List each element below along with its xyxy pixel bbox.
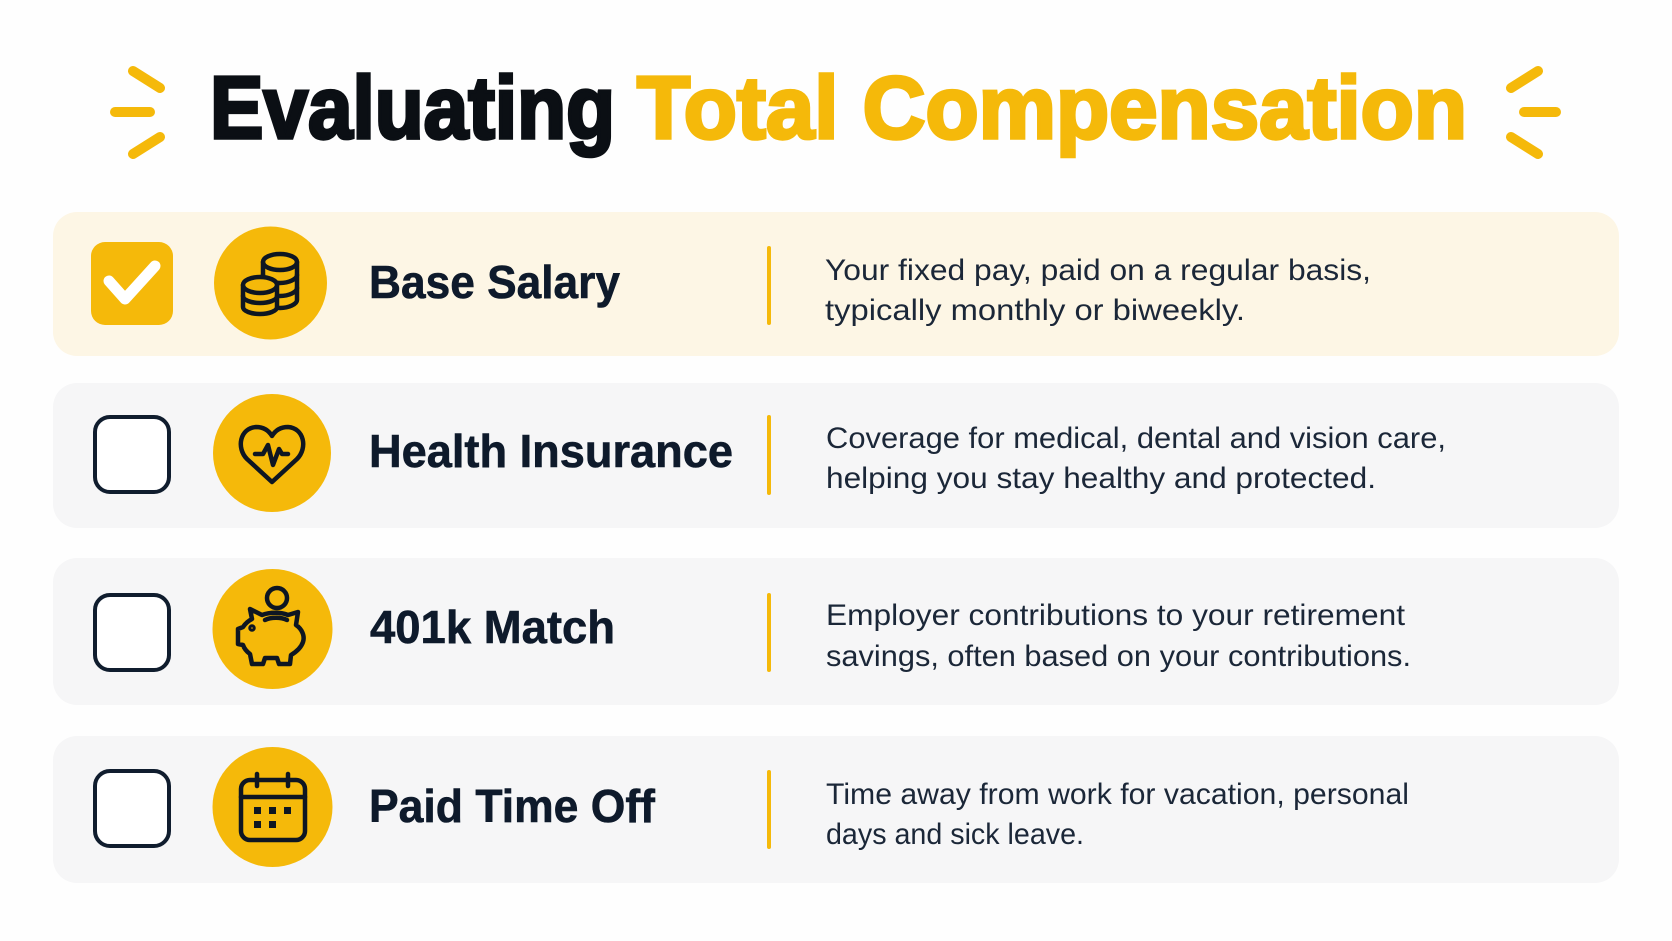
description: 401k match: savings, often based on your contributions. xyxy=(826,640,1411,673)
title: Total Compensation xyxy=(637,58,1467,157)
label: health insurance: Health Insurance xyxy=(369,425,733,477)
checked checkbox xyxy=(91,242,173,325)
description: health insurance: Coverage for medical, dental and vision care, xyxy=(826,422,1446,455)
empty checkbox xyxy=(95,595,169,670)
description: health insurance: helping you stay healthy and protected. xyxy=(826,462,1376,495)
description: paid time off: days and sick leave. xyxy=(826,818,1084,851)
icon: coins xyxy=(214,226,327,340)
icon: calendar xyxy=(212,747,332,867)
panel: 401k match xyxy=(53,558,1619,705)
panel: base salary xyxy=(53,212,1619,356)
panel: paid time off xyxy=(53,736,1619,883)
label: base salary: Base Salary xyxy=(369,256,620,308)
description: 401k match: Employer contributions to your retirement xyxy=(826,599,1406,632)
description: health insurance xyxy=(826,422,1446,495)
icon: left sparkle accent xyxy=(115,71,160,154)
divider xyxy=(767,246,771,325)
divider xyxy=(767,593,771,672)
description: 401k match xyxy=(826,599,1411,673)
title: Evaluating xyxy=(210,58,615,157)
icon: heart with pulse xyxy=(213,394,331,512)
description: base salary xyxy=(825,254,1371,327)
divider xyxy=(767,770,771,849)
empty checkbox xyxy=(95,771,169,846)
title xyxy=(210,58,1467,157)
icon: piggy bank xyxy=(212,569,332,689)
description: paid time off xyxy=(826,778,1409,851)
empty checkbox xyxy=(95,417,169,492)
label: 401k match: 401k Match xyxy=(370,601,615,653)
description: base salary: Your fixed pay, paid on a regular basis, xyxy=(825,254,1371,287)
label: paid time off: Paid Time Off xyxy=(369,780,656,832)
panel: health insurance xyxy=(53,383,1619,528)
description: paid time off: Time away from work for vacation, personal xyxy=(826,778,1409,811)
icon: right sparkle accent xyxy=(1511,71,1556,154)
description: base salary: typically monthly or biweekly. xyxy=(825,294,1245,327)
divider xyxy=(767,415,771,495)
